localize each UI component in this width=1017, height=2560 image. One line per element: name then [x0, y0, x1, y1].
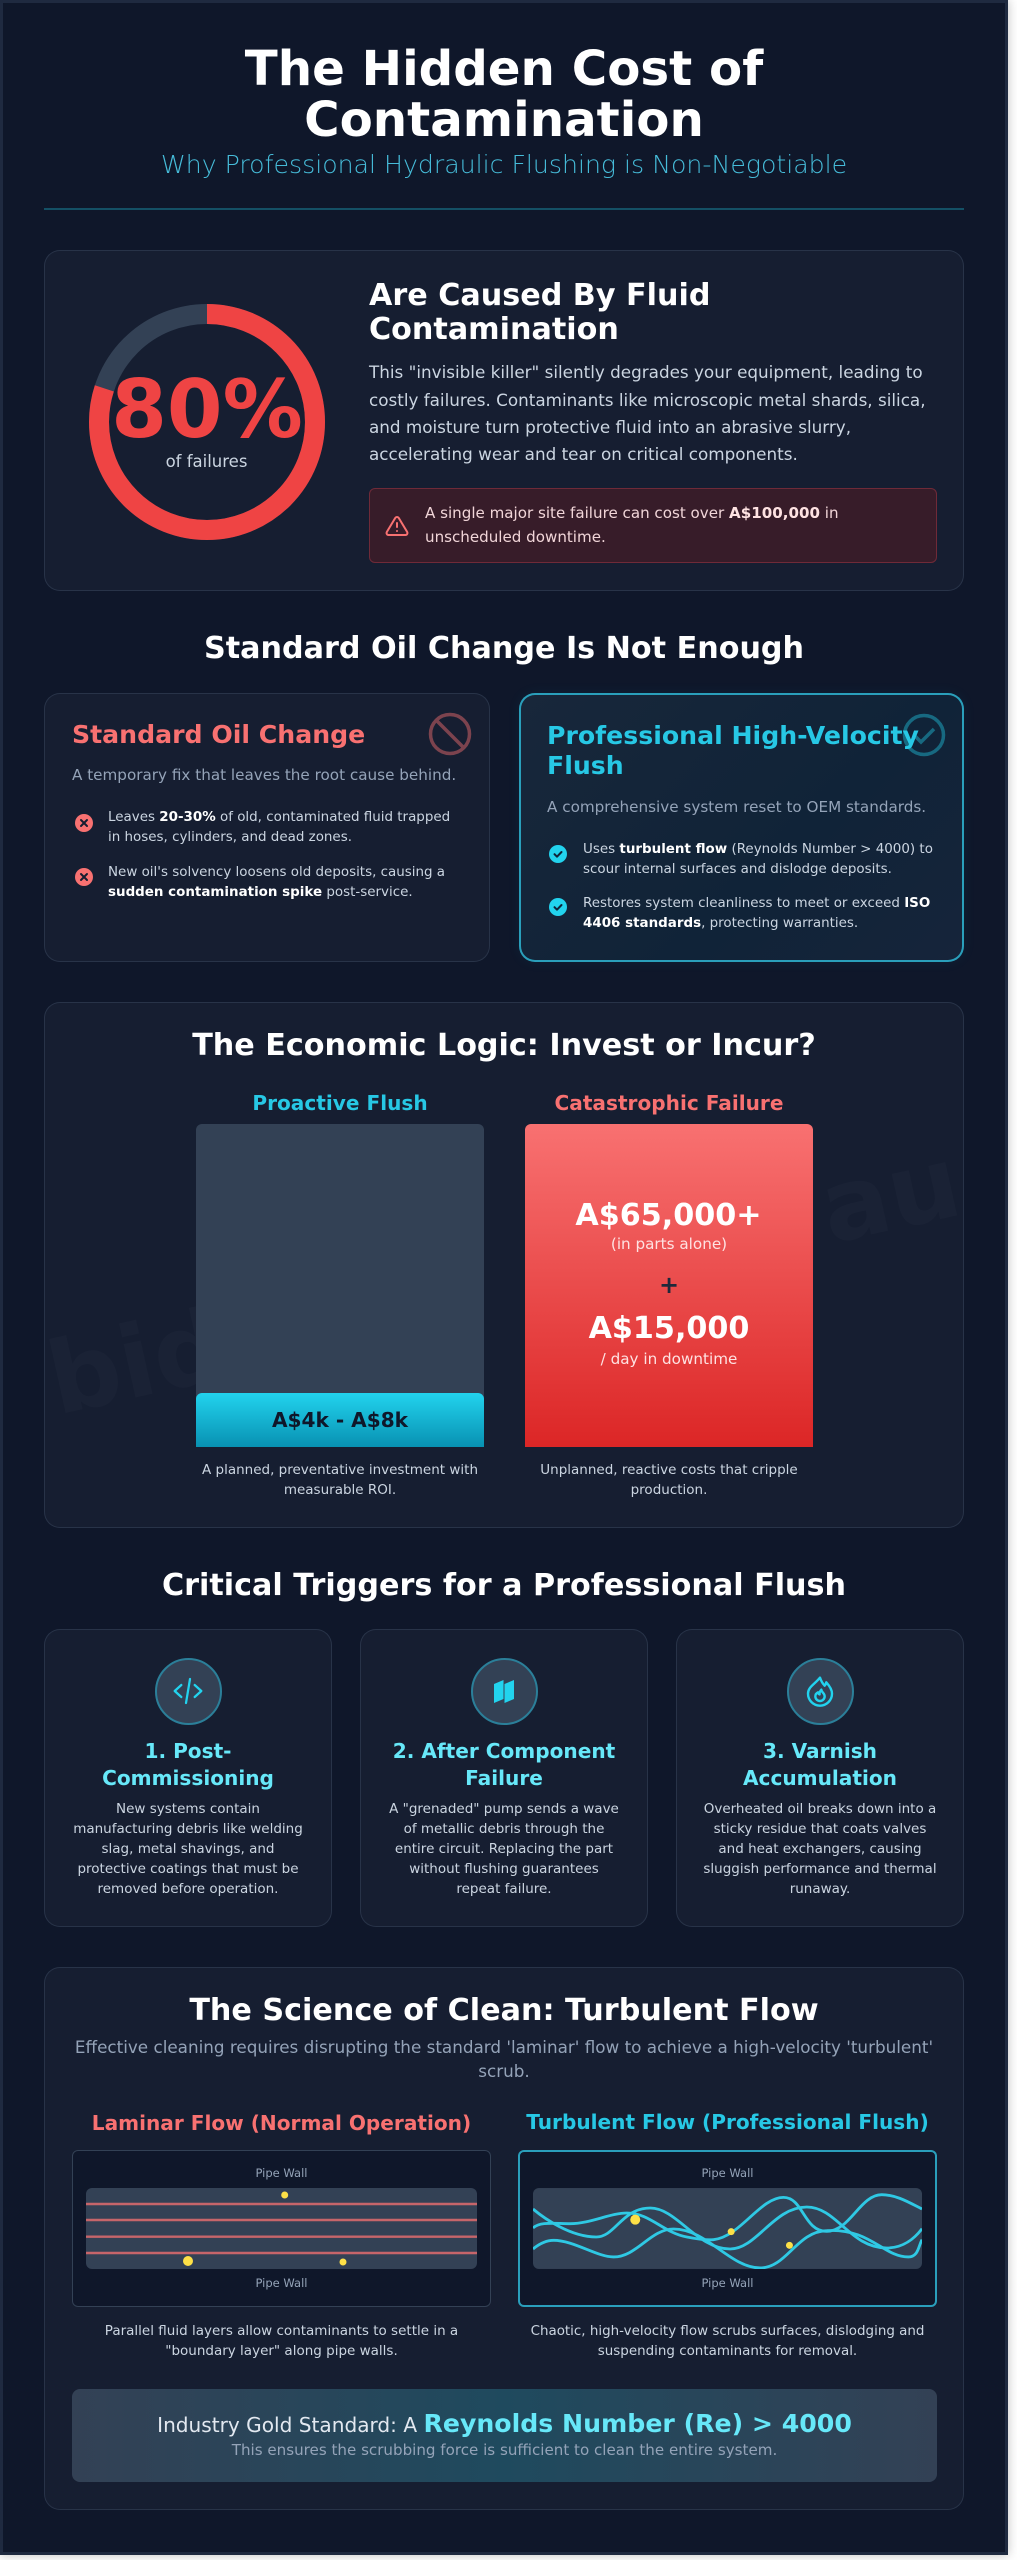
watermark — [37, 1122, 971, 1440]
card subtitle: A temporary fix that leaves the root cause behind. — [72, 766, 456, 784]
body text: and moisture turn protective fluid into an abrasive slurry, — [369, 417, 851, 437]
downtime cost caption: / day in downtime — [601, 1350, 737, 1368]
label: proactive flush: Proactive Flush — [252, 1091, 428, 1115]
panel: professional high-velocity flush — [519, 693, 964, 962]
label: turbulent flow: Turbulent Flow (Professional Flush) — [526, 2110, 929, 2134]
trigger text: sticky residue that coats valves — [714, 1821, 926, 1837]
trigger text: protective coatings that must be — [77, 1861, 299, 1877]
bullet text: Restores system cleanliness to meet or exceed ISO — [583, 896, 930, 910]
icon: warning triangle — [386, 516, 408, 536]
bullet text — [108, 864, 445, 900]
proactive flush description: A planned, preventative investment with — [202, 1462, 478, 1478]
trigger text: manufacturing debris like welding — [73, 1821, 303, 1837]
laminar description: "boundary layer" along pipe walls. — [165, 2343, 398, 2359]
trigger text: New systems contain — [116, 1801, 260, 1817]
trigger text — [389, 1801, 619, 1897]
bullet text: Leaves 20-30% of old, contaminated fluid trapped — [108, 810, 450, 825]
body text: costly failures. Contaminants like microscopic metal shards, silica, — [369, 390, 926, 410]
heading: caused by fluid contamination — [369, 278, 710, 347]
panel: economic logic — [44, 1002, 964, 1528]
laminar pipe with parallel lines and particles — [86, 2188, 477, 2269]
turbulent description: Chaotic, high-velocity flow scrubs surfaces, dislodging and — [531, 2324, 924, 2339]
catastrophic failure description: production. — [631, 1482, 707, 1498]
card title — [547, 721, 919, 780]
icon: check circle — [902, 714, 946, 756]
title: The Hidden Cost of — [245, 41, 763, 97]
alert text — [425, 504, 839, 546]
trigger text: of metallic debris through the — [404, 1821, 604, 1837]
card title: Professional High-Velocity — [547, 721, 919, 750]
turbulent description: suspending contaminants for removal. — [598, 2344, 857, 2359]
heading: turbulent flow: The Science of Clean: Turbulent Flow — [189, 1993, 819, 2028]
section intro: scrub. — [478, 2061, 530, 2081]
plus sign: + — [659, 1271, 679, 1299]
label: laminar flow: Laminar Flow (Normal Operation) — [92, 2111, 471, 2135]
diagram: laminar flow — [72, 2150, 491, 2307]
heading: caused by fluid contamination: Contamination — [369, 312, 619, 347]
body text — [368, 362, 926, 464]
section intro — [75, 2037, 933, 2081]
laminar description: Parallel fluid layers allow contaminants to settle in a — [105, 2323, 458, 2339]
top pipe wall label: Pipe Wall — [702, 2166, 753, 2180]
trigger title: 2. After Component — [393, 1738, 615, 1762]
trigger text: entire circuit. Replacing the part — [395, 1841, 613, 1857]
catastrophic failure description — [540, 1462, 798, 1498]
turbulent description — [531, 2324, 924, 2359]
trigger title: Commissioning — [102, 1766, 274, 1790]
top pipe wall label: Pipe Wall — [256, 2166, 307, 2180]
label: catastrophic failure: Catastrophic Failure — [555, 1091, 783, 1115]
bullet text: sudden contamination spike post-service. — [108, 884, 413, 900]
parts cost value: A$65,000+ — [575, 1198, 762, 1233]
heading: invest or incur: The Economic Logic: Invest or Incur? — [192, 1028, 816, 1063]
stat caption: of failures — [166, 452, 247, 471]
icon: check bullet — [549, 898, 567, 916]
trigger title — [102, 1738, 274, 1790]
trigger title: Accumulation — [743, 1766, 897, 1790]
trigger text: removed before operation. — [98, 1881, 278, 1897]
watermark: bid — [37, 1286, 236, 1438]
proactive flush description: measurable ROI. — [284, 1482, 396, 1498]
title — [244, 41, 764, 148]
title: Contamination — [304, 92, 704, 148]
trigger title — [743, 1738, 897, 1790]
trigger title: 1. Post- — [144, 1738, 232, 1762]
parts cost caption: (in parts alone) — [611, 1235, 727, 1253]
proactive flush description — [202, 1462, 478, 1498]
panel: science of clean — [44, 1967, 964, 2510]
heading: critical triggers: Critical Triggers for a Professional Flush — [162, 1568, 846, 1603]
donut chart: 80 percent — [89, 304, 325, 540]
icon: cross bullet — [75, 868, 93, 886]
panel: trigger 1 — [44, 1629, 332, 1927]
card title: Flush — [547, 751, 624, 780]
heading: caused by fluid contamination: Are Caused By Fluid — [369, 278, 710, 313]
panel: standard oil change — [44, 693, 490, 962]
bottom pipe wall label: Pipe Wall — [702, 2276, 753, 2290]
card subtitle: A comprehensive system reset to OEM standards. — [547, 798, 926, 816]
trigger text: repeat failure. — [456, 1881, 552, 1897]
bar fill: A$4k to A$8k — [196, 1393, 484, 1447]
card title: Standard Oil Change — [72, 720, 365, 749]
bar fill: A$4k to A$8k: A$4k - A$8k — [272, 1408, 408, 1432]
watermark: au — [810, 1123, 971, 1267]
alert text: A single major site failure can cost over A$100,000 in — [425, 504, 839, 522]
catastrophic failure description: Unplanned, reactive costs that cripple — [540, 1462, 798, 1478]
bar: catastrophic failure cost — [525, 1124, 813, 1447]
trigger title — [393, 1738, 615, 1790]
icon: prohibited — [428, 712, 472, 756]
icon: map fold — [470, 1658, 538, 1724]
trigger text: Overheated oil breaks down into a — [704, 1801, 936, 1817]
laminar description — [105, 2323, 458, 2359]
bullet text: New oil's solvency loosens old deposits, causing a — [108, 864, 445, 880]
heading: standard oil change is not enough: Standard Oil Change Is Not Enough — [204, 630, 804, 666]
downtime cost value: A$15,000 — [589, 1311, 749, 1346]
bullet text: 4406 standards, protecting warranties. — [583, 916, 858, 930]
alert text: unscheduled downtime. — [425, 528, 606, 546]
bar: proactive flush cost — [196, 1124, 484, 1447]
bullet text: scour internal surfaces and dislodge deposits. — [583, 862, 892, 876]
icon: code — [154, 1658, 222, 1724]
trigger title: 3. Varnish — [763, 1738, 877, 1762]
panel: 80 percent statistic — [44, 250, 964, 591]
trigger text: slag, metal shavings, and — [101, 1841, 274, 1857]
panel: trigger 3 — [676, 1629, 964, 1927]
subtitle: Why Professional Hydraulic Flushing is Non-Negotiable — [161, 150, 847, 179]
bullet text: Uses turbulent flow (Reynolds Number > 4000) to — [583, 842, 933, 856]
callout note: This ensures the scrubbing force is sufficient to clean the entire system. — [232, 2441, 777, 2459]
trigger text: without flushing guarantees — [409, 1861, 599, 1877]
trigger text: A "grenaded" pump sends a wave — [389, 1801, 619, 1817]
trigger text: runaway. — [790, 1881, 850, 1897]
trigger text: and heat exchangers, causing — [718, 1841, 922, 1857]
body text: This "invisible killer" silently degrades your equipment, leading to — [369, 362, 923, 382]
icon: flame — [786, 1658, 854, 1724]
bottom pipe wall label: Pipe Wall — [256, 2276, 307, 2290]
diagram: turbulent flow — [518, 2150, 937, 2307]
trigger text — [73, 1801, 303, 1897]
body text: accelerating wear and tear on critical components. — [369, 444, 798, 464]
bullet text: in hoses, cylinders, and dead zones. — [108, 830, 352, 845]
bullet text — [108, 810, 450, 845]
big stat 80%: 80% — [111, 363, 303, 456]
icon: check bullet — [549, 845, 567, 863]
alert callout — [369, 488, 937, 563]
trigger title: Failure — [465, 1766, 543, 1790]
bullet text — [583, 842, 933, 876]
callout headline: Industry Gold Standard: A Reynolds Number (Re) > 4000 — [157, 2409, 852, 2438]
trigger text: sluggish performance and thermal — [703, 1861, 937, 1877]
panel: trigger 2 — [360, 1629, 648, 1927]
trigger text — [703, 1801, 937, 1897]
callout: industry gold standard — [72, 2389, 937, 2482]
bullet text — [583, 896, 930, 930]
section intro: Effective cleaning requires disrupting the standard 'laminar' flow to achieve a high-velocity 'turbulent' — [75, 2037, 933, 2057]
turbulent pipe with chaotic lines and particles — [533, 2188, 922, 2269]
icon: cross bullet — [75, 814, 93, 832]
